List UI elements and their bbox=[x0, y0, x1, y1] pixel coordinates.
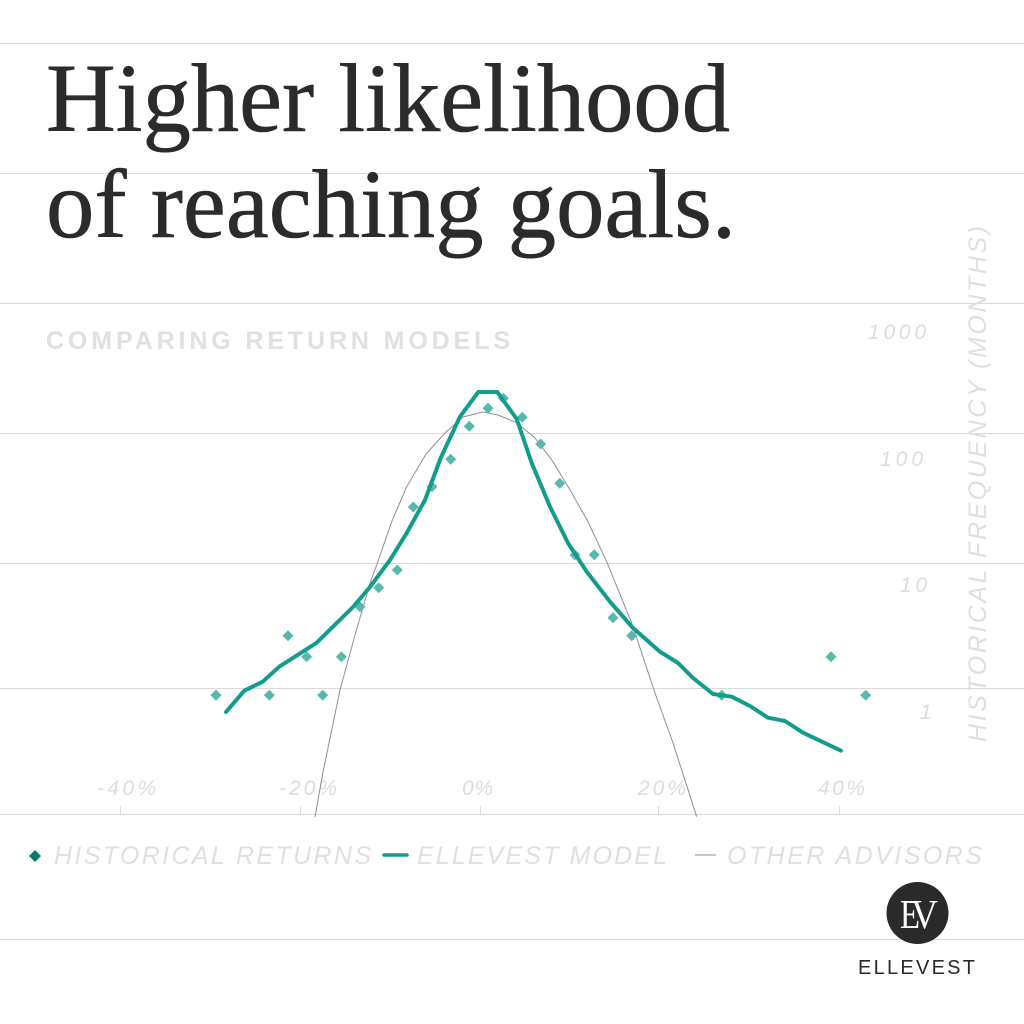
y axis title: HISTORICAL FREQUENCY (MONTHS) bbox=[964, 226, 992, 742]
chart subtitle: COMPARING RETURN MODELS bbox=[46, 327, 510, 355]
x axis tick labels: -20% bbox=[279, 777, 337, 800]
ellevest logo bbox=[858, 882, 975, 979]
ellevest logo: E bbox=[900, 891, 920, 937]
x axis tick labels: -40% bbox=[97, 777, 156, 800]
x axis tick labels: 0% bbox=[462, 777, 493, 800]
legend bbox=[29, 842, 982, 870]
x axis tick labels bbox=[97, 777, 865, 800]
historical returns points bbox=[210, 393, 871, 701]
y axis tick labels: 100 bbox=[880, 448, 923, 471]
legend: historical returns: HISTORICAL RETURNS bbox=[54, 842, 371, 870]
title: of reaching goals. bbox=[46, 151, 736, 258]
y axis tick labels bbox=[868, 321, 932, 724]
legend: ellevest model: ELLEVEST MODEL bbox=[417, 842, 667, 870]
legend: other advisors: OTHER ADVISORS bbox=[727, 842, 982, 870]
y axis tick labels: 1000 bbox=[868, 321, 926, 344]
ellevest model curve bbox=[226, 392, 841, 751]
y axis tick labels: 10 bbox=[900, 574, 927, 597]
ellevest logo: V bbox=[911, 891, 938, 937]
title: Higher likelihood bbox=[46, 45, 730, 152]
ellevest logo: ELLEVEST bbox=[858, 957, 975, 979]
x axis tick labels: 40% bbox=[818, 777, 865, 800]
other advisors curve bbox=[315, 412, 697, 817]
title bbox=[46, 45, 736, 258]
y axis tick labels: 1 bbox=[920, 701, 932, 724]
x axis tick labels: 20% bbox=[637, 777, 686, 800]
